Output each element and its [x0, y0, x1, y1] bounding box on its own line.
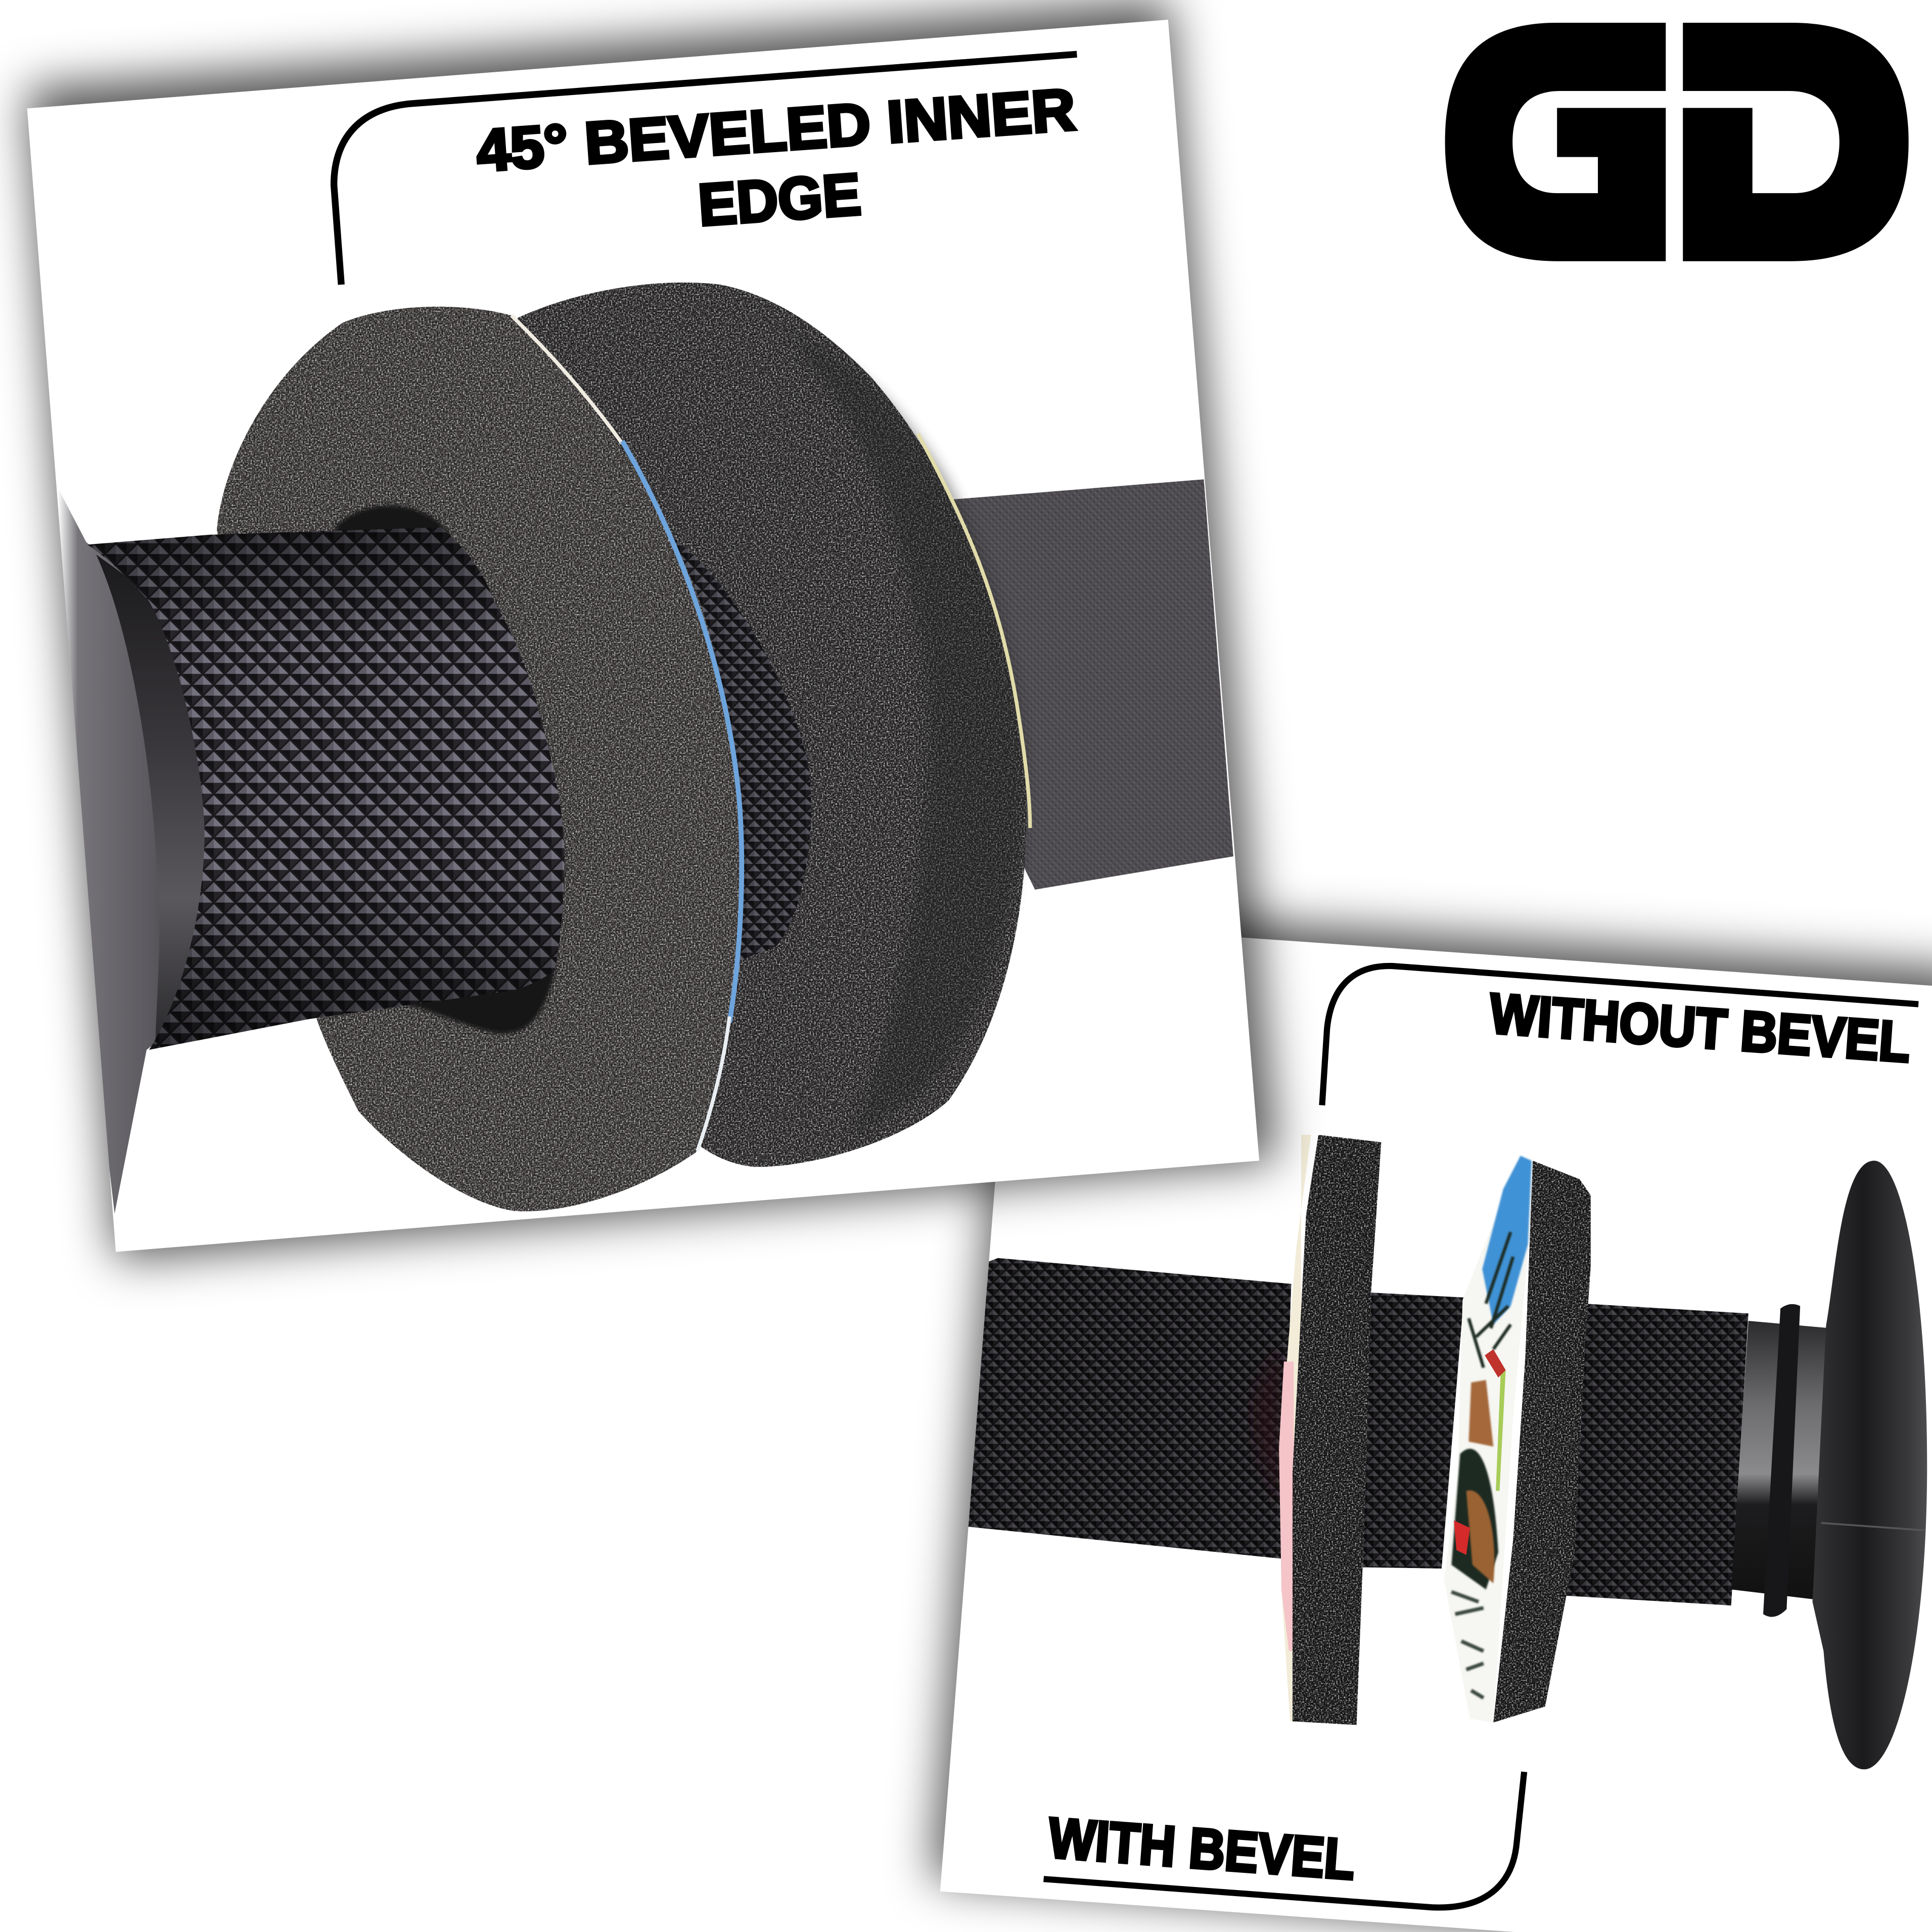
- front foam ring: [217, 307, 742, 1211]
- grip segment left: [967, 1258, 1291, 1558]
- letter D: [1683, 23, 1909, 261]
- label: 45 degree beveled inner edge: 45° BEVELED INNER: [474, 76, 1078, 184]
- collar ring: [1763, 1304, 1800, 1617]
- logo: GD: [1445, 23, 1909, 261]
- photo: grip with two foam rings, side view: [967, 1135, 1927, 1769]
- bracket: with bevel: [1044, 1772, 1524, 1908]
- near grip: [87, 527, 564, 1050]
- grip segment right: [1565, 1304, 1749, 1605]
- panel: without and with bevel comparison: [933, 907, 1932, 1932]
- rear ring edge line: [918, 434, 1030, 828]
- end flange: [1813, 1161, 1927, 1769]
- foam ring with bevel: [1493, 1161, 1591, 1723]
- far grip: [912, 479, 1233, 890]
- gap highlight: [1365, 1569, 1444, 1591]
- bracket: bevel callout: [334, 54, 1077, 285]
- ring hole: [335, 505, 564, 1033]
- printed ring face: [1444, 1156, 1535, 1723]
- flange: [58, 488, 209, 1214]
- label: 45 degree beveled inner edge: [474, 76, 1078, 238]
- panel: 45 degree beveled inner edge close-up: [27, 0, 1276, 1259]
- ring edge print, left: [1280, 1135, 1311, 1721]
- letter G: [1445, 23, 1666, 261]
- grip segment middle: [1363, 1293, 1464, 1569]
- bracket: without bevel: [1322, 966, 1918, 1105]
- label: 45 degree beveled inner edge: EDGE: [696, 161, 863, 238]
- label: with bevel: WITH BEVEL: [1046, 1806, 1357, 1892]
- end collar: [1731, 1321, 1831, 1599]
- foam ring without bevel: [1293, 1135, 1381, 1725]
- front ring edge line: [512, 315, 622, 444]
- middle grip: [641, 532, 811, 961]
- rear foam ring: [518, 283, 1027, 1167]
- photo: foam rings on grip: [58, 283, 1233, 1214]
- collar: [96, 555, 209, 1045]
